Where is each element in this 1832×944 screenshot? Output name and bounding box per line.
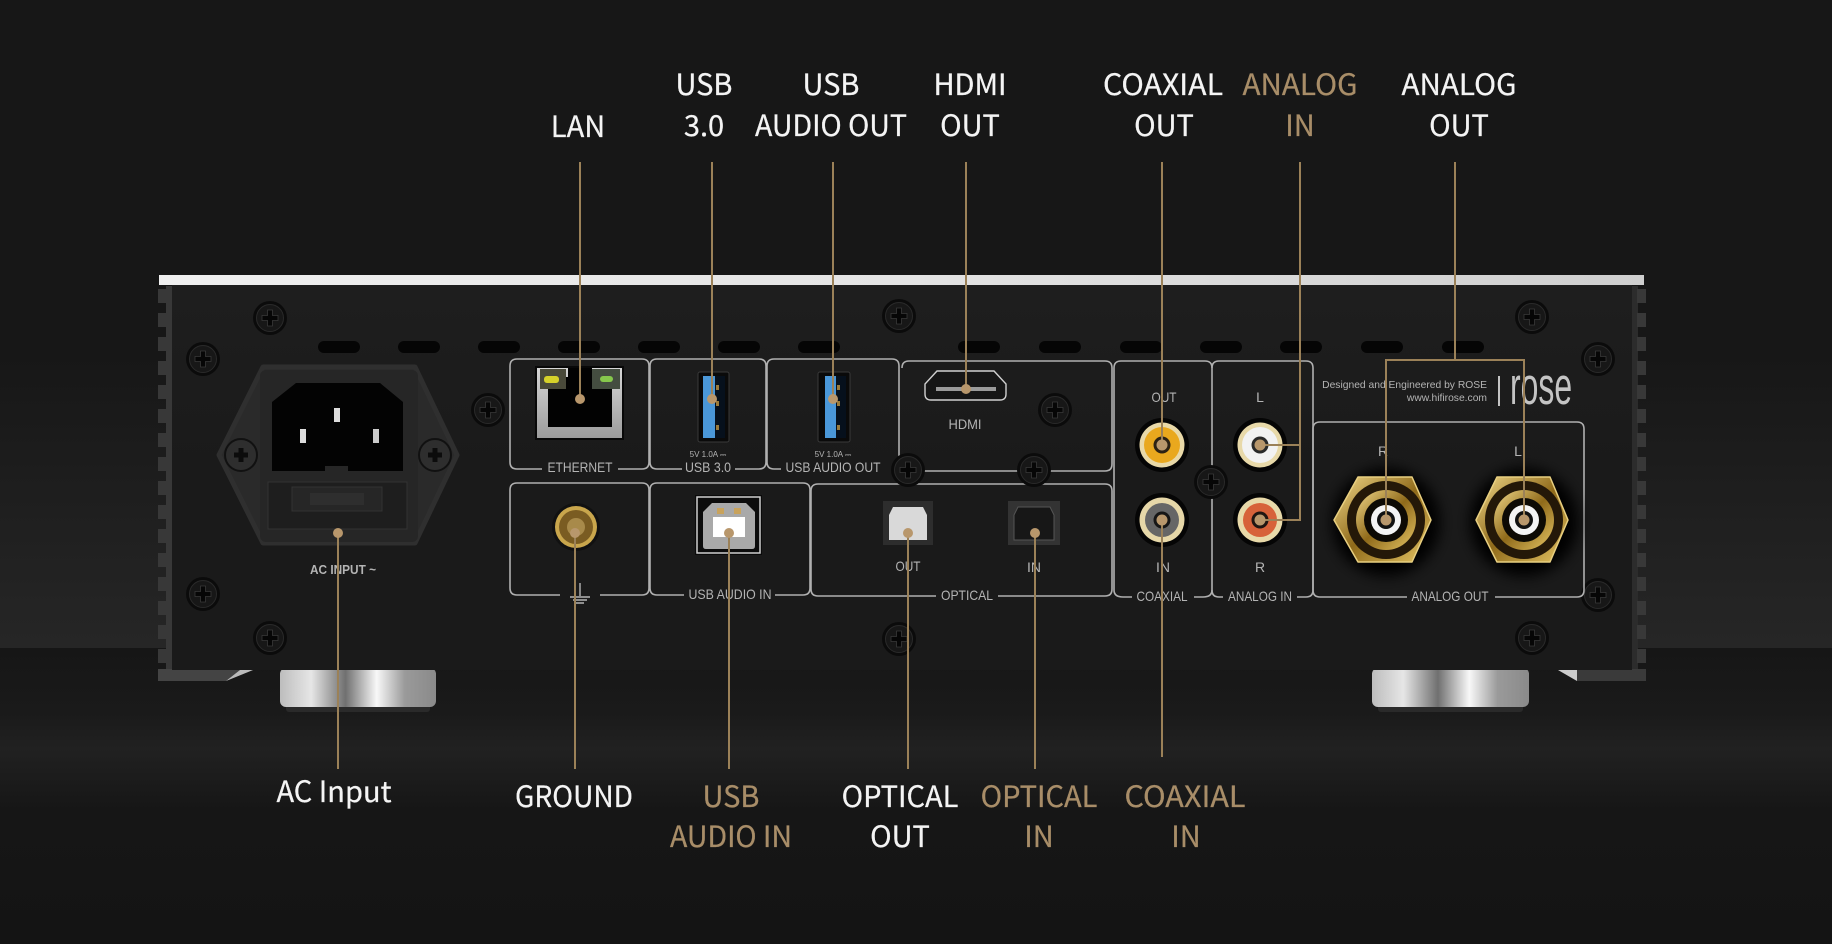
hdmi label: HDMI [948, 416, 982, 432]
callout: COAXIAL IN: COAXIAL [1124, 774, 1246, 816]
callout: OPTICAL IN [981, 528, 1097, 856]
callout: USB AUDIO IN: USB [703, 774, 759, 816]
optical out port [883, 501, 933, 545]
brand text [1322, 380, 1487, 404]
RCA labels: OUT [1152, 389, 1177, 405]
callout: AC Input: AC Input [276, 769, 392, 811]
callout: USB AUDIO IN [670, 528, 792, 856]
ground stud and symbol [552, 503, 600, 603]
panel section labels: USB 3.0 [685, 459, 731, 475]
usb 3.0 port [698, 372, 729, 442]
coaxial out RCA jack [1135, 418, 1189, 472]
callout: COAXIAL OUT [1103, 62, 1223, 450]
callout: COAXIAL IN: IN [1171, 814, 1201, 856]
RCA labels: R [1255, 559, 1265, 575]
analog out R/L labels: R [1378, 443, 1388, 459]
panel outlines [510, 359, 1584, 597]
brand text: www.hifirose.com [1406, 393, 1487, 404]
callout: HDMI OUT [933, 62, 1007, 394]
panel section labels: USB AUDIO OUT [786, 459, 881, 475]
callout: OPTICAL IN: OPTICAL [981, 774, 1097, 816]
panel section labels: OPTICAL [941, 587, 993, 603]
panel section labels: ANALOG OUT [1412, 588, 1489, 604]
panel section labels: USB AUDIO IN [688, 586, 772, 602]
analog out R/L labels [1378, 443, 1522, 459]
hdmi port [925, 371, 1006, 400]
callout: GROUND [515, 528, 633, 816]
callout: USB AUDIO OUT: AUDIO OUT [755, 103, 907, 145]
chassis side fins [158, 286, 1646, 681]
usb rating labels: 5V 1.0A ⎓ [815, 450, 852, 459]
callout: AC Input [276, 528, 392, 811]
optical in port [1008, 501, 1060, 545]
panel section labels: ETHERNET [548, 459, 613, 475]
callout: OPTICAL OUT [842, 528, 958, 856]
feet [280, 668, 1529, 712]
callout: ANALOG IN [1242, 62, 1358, 526]
panel section labels [548, 459, 1489, 604]
RCA labels: L [1256, 389, 1264, 405]
XLR-style gold connector L [1470, 468, 1578, 576]
callout: ANALOG IN: IN [1285, 103, 1315, 145]
panel section labels: COAXIAL [1136, 588, 1188, 604]
callout: OPTICAL IN: IN [1024, 814, 1054, 856]
callout: USB 3.0 [676, 62, 732, 404]
callout: ANALOG OUT: ANALOG [1402, 62, 1516, 104]
XLR-style gold connector R [1332, 468, 1440, 576]
usb rating labels [690, 450, 852, 459]
callout: LAN: LAN [551, 104, 605, 146]
AC input label: AC INPUT ~ [310, 562, 376, 577]
callout: COAXIAL OUT: COAXIAL [1103, 62, 1223, 104]
brand text: Designed and Engineered by ROSE [1322, 380, 1487, 391]
callout: LAN [551, 104, 605, 404]
ethernet port [535, 366, 624, 440]
callout: USB AUDIO OUT [755, 62, 907, 404]
callout: USB 3.0: USB [676, 62, 732, 104]
callout: USB 3.0: 3.0 [684, 103, 724, 145]
chassis screws [186, 299, 1615, 656]
rose logo: rose [1510, 357, 1572, 416]
silver top strip [159, 275, 1644, 285]
usb rating labels: 5V 1.0A ⎓ [690, 450, 727, 459]
RCA labels: IN [1156, 559, 1170, 575]
analog in L RCA jack [1233, 418, 1287, 472]
RCA labels [1152, 389, 1265, 575]
callout: COAXIAL IN [1124, 514, 1246, 856]
device: rear panel of the streamer [158, 275, 1646, 712]
callout: OPTICAL OUT: OPTICAL [842, 774, 958, 816]
usb audio out port [818, 372, 850, 442]
AC inlet [219, 367, 457, 543]
screws on the panel dividers [891, 453, 1228, 499]
callout: ANALOG OUT: OUT [1429, 103, 1489, 145]
chassis body [172, 285, 1632, 670]
callout: HDMI OUT: HDMI [933, 62, 1007, 104]
optical labels [896, 558, 1041, 575]
callout: ANALOG OUT [1380, 62, 1530, 526]
analog in R RCA jack [1233, 493, 1287, 547]
ventilation slots [318, 341, 1484, 353]
panel section labels: ANALOG IN [1228, 588, 1292, 604]
callout: HDMI OUT: OUT [940, 103, 1000, 145]
analog out R/L labels: L [1514, 443, 1522, 459]
optical labels: IN [1027, 559, 1041, 575]
callout: GROUND: GROUND [515, 774, 633, 816]
callout: ANALOG IN: ANALOG [1242, 62, 1358, 104]
callout: USB AUDIO OUT: USB [803, 62, 859, 104]
optical labels: OUT [896, 558, 921, 574]
usb audio in port [695, 495, 762, 555]
coaxial in RCA jack [1135, 493, 1189, 547]
callout: COAXIAL OUT: OUT [1134, 103, 1194, 145]
callout: OPTICAL OUT: OUT [870, 814, 930, 856]
callout: USB AUDIO IN: AUDIO IN [670, 814, 792, 856]
